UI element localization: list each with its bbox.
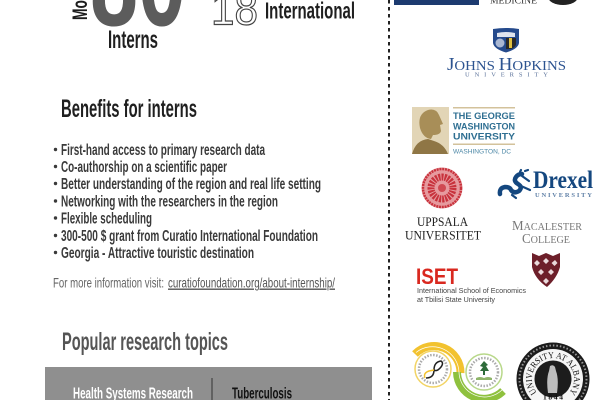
- logo: George Washington University: WASHINGTON: [453, 122, 515, 132]
- logo: Macalester College: [512, 218, 582, 246]
- logo: University at Albany seal: UNIVERSITY AT ALBANY: [526, 352, 580, 396]
- logo: Georgian school interlinked circles: [415, 346, 503, 399]
- benefits list: Flexible scheduling: [61, 210, 152, 228]
- benefits list: First-hand access to primary research data: [61, 142, 265, 159]
- logo: ISET: at Tbilisi State University: [417, 297, 496, 304]
- benefits list: Better understanding of the region and real life setting: [61, 176, 321, 193]
- logo: Uppsala Universitet: UNIVERSITET: [405, 228, 481, 242]
- logo: Johns Hopkins University: [447, 28, 566, 78]
- logo: George Washington University: WASHINGTON, DC: [453, 148, 511, 156]
- heading: Popular research topics: Popular research topics: [62, 328, 228, 356]
- logo: Drexel University: UNIVERSITY: [535, 192, 592, 199]
- stat: 18 international: [211, 0, 355, 34]
- more information link: [53, 274, 335, 290]
- benefits list: 300-500 $ grant from Curatio International Foundation: [61, 228, 318, 245]
- logo: dark seal: [548, 0, 578, 5]
- logo: George Washington University: [412, 107, 515, 156]
- logo: Johns Hopkins University: JOHNS HOPKINS: [447, 54, 566, 74]
- logo: Drexel University: [500, 167, 593, 199]
- logo: ISET: ISET: [416, 264, 458, 289]
- logo: Johns Hopkins University: UNIVERSITY: [465, 72, 548, 78]
- logo: ISET: [416, 264, 527, 304]
- logo: maroon shield: [532, 253, 560, 287]
- logo: Uppsala Universitet: UPPSALA: [417, 215, 468, 229]
- benefits list: [54, 142, 321, 262]
- benefits list: Co-authorship on a scientific paper: [61, 159, 227, 176]
- dragon: [500, 170, 530, 198]
- heading: Benefits for interns: Benefits for interns: [61, 95, 197, 123]
- logo: George Washington University: THE GEORGE: [453, 111, 515, 121]
- shield: [493, 28, 519, 52]
- more information link: For more information visit:: [53, 274, 164, 290]
- stat: more than 80 interns: [69, 0, 186, 54]
- logo: Uppsala Universitet: [405, 168, 481, 242]
- benefits list: Georgia - Attractive touristic destination: [61, 245, 254, 262]
- logo: University at Albany seal: [516, 342, 590, 400]
- logo: Macalester College: COLLEGE: [522, 231, 570, 246]
- logo: Macalester College: MACALESTER: [512, 218, 582, 233]
- portrait: [412, 107, 449, 154]
- logo: ISET: International School of Economics: [417, 288, 527, 295]
- more information link: curatiofoundation.org/about-internship/: [168, 274, 335, 290]
- benefits list: Networking with the researchers in the region: [61, 194, 278, 210]
- panel: research topics: [45, 367, 372, 400]
- logo: navy banner: [394, 0, 479, 5]
- red seal: [422, 168, 462, 208]
- label: Interns: Interns: [108, 26, 158, 54]
- logo: George Washington University: UNIVERSITY: [453, 132, 515, 142]
- dotted divider: [388, 0, 390, 400]
